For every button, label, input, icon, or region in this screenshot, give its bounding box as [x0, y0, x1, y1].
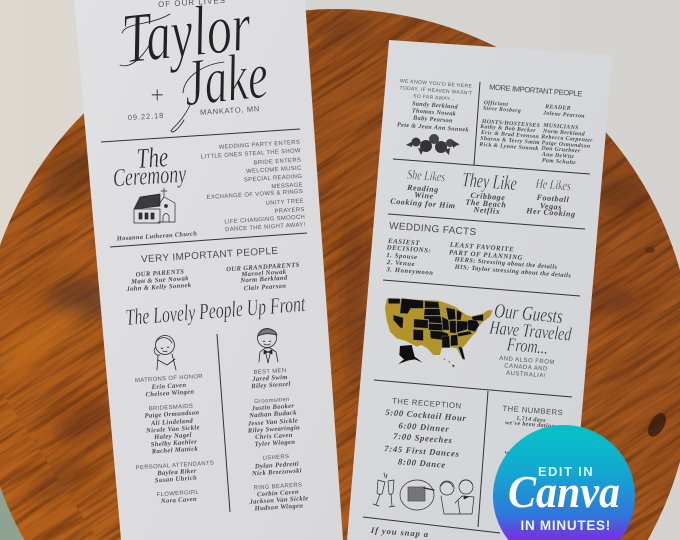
text block: right attendants: Chris Caven	[255, 432, 293, 441]
greenery corner	[0, 487, 24, 540]
text block: they like: They Like	[461, 167, 518, 195]
map: hawaii	[443, 358, 455, 367]
icon: dancing couple	[440, 480, 474, 514]
text block: in memoriam: TODAY, IF HEAVEN WASN'T	[399, 85, 473, 97]
text block: she likes: Cooking for Him	[390, 197, 456, 210]
text block: in memoriam: Thomas Nowak	[412, 107, 457, 118]
badge text: in minutes: IN MINUTES!	[520, 518, 612, 533]
text block: in memoriam: Pete & Jean Ann Sonnek	[397, 121, 470, 134]
text block: the numbers: 1,714 days	[516, 416, 546, 424]
text block: ceremony order: LITTLE ONES STEAL THE SHOW	[201, 148, 301, 160]
text block: right attendants: Tyler Wingen	[254, 439, 296, 448]
heading: very important people: VERY IMPORTANT PEOPLE	[141, 246, 279, 265]
text block: right attendants: Justin Booker	[250, 403, 295, 412]
text block: parents: John & Kelly Sonnek	[125, 282, 192, 293]
text block: reader: READER	[544, 104, 571, 112]
text block: officiant: Steve Rosberg	[483, 106, 521, 114]
heading: more important people: MORE IMPORTANT PEOPLE	[489, 82, 583, 99]
text block: reception schedule	[384, 407, 467, 470]
text block: right attendants: Jesse Van Sickle	[247, 417, 298, 428]
text block: least favorite: PART OF PLANNING	[449, 249, 523, 262]
text block: grandparents	[226, 262, 300, 292]
text block: right attendants: USHERS	[263, 454, 289, 462]
icon: dinner plate	[400, 480, 434, 510]
text block: they like	[461, 167, 518, 216]
text block: parents: OUR PARENTS	[136, 268, 184, 279]
text block: she likes: Wine	[414, 190, 434, 201]
text block: hosts: Rick & Lynne Sonnek	[478, 142, 539, 152]
text block: canada and australia: AUSTRALIA!	[506, 371, 546, 379]
text block: ceremony order: SPECIAL READING	[244, 174, 302, 184]
text block: musicians: Pam Schultz	[542, 158, 577, 166]
text block: canada and australia	[499, 356, 555, 379]
text block: easiest decisions: 1. Spouse	[386, 252, 418, 261]
text block: left attendants	[135, 374, 214, 505]
text block: hosts: Eric & Brad Evenson	[480, 130, 539, 140]
badge logo: canva: Canva	[508, 466, 620, 517]
text block: he likes: He Likes	[534, 175, 572, 194]
text block: right attendants: Nathan Budack	[248, 409, 297, 420]
map: gold states	[385, 298, 493, 360]
text block: right attendants: RING BEARERS	[254, 482, 302, 492]
text block: ceremony order: PRAYERS	[274, 207, 305, 215]
text block: reception schedule: 8:00 Dance	[398, 456, 446, 470]
icon: bride	[154, 336, 176, 370]
text block: least favorite: HERS: Stressing about the details	[453, 256, 558, 271]
text block: right attendants: Riley Swearingin	[247, 424, 300, 435]
text block: hosts	[478, 119, 540, 152]
text block: ceremony order: EXCHANGE OF VOWS & RINGS	[206, 189, 303, 201]
title: couple names: +	[149, 83, 165, 109]
text block: canada and australia: AND ALSO FROM	[499, 356, 555, 366]
text block: least favorite	[449, 242, 572, 279]
chart: us map of guest origins	[385, 298, 493, 367]
text block: the numbers: we've been	[505, 450, 536, 458]
text block: left attendants: Nicole Van Sickle	[145, 424, 200, 435]
text block: hosts: HOSTS/HOSTESSES	[481, 119, 540, 129]
text block: right attendants: Nick Brzezowski	[251, 467, 302, 478]
heading: the ceremony: The	[136, 142, 169, 175]
text block: grandparents: Clair Pearson	[244, 283, 286, 292]
text block: in memoriam: SO FAR AWAY...	[413, 93, 455, 103]
heading: the numbers: THE NUMBERS	[502, 404, 564, 417]
text block: easiest decisions: 2. Venue	[386, 259, 415, 268]
text block: he likes: Football	[535, 193, 570, 204]
text block: ceremony order: WELCOME MUSIC	[246, 166, 302, 175]
text block: he likes: Her Cooking	[525, 206, 576, 219]
map: alaska	[398, 345, 423, 364]
badge text: edit in: EDIT IN	[538, 464, 594, 479]
title: couple names: Jake	[180, 39, 271, 120]
text block: easiest decisions: DECISIONS:	[385, 244, 432, 255]
text block: right attendants: BEST MEN	[253, 368, 287, 376]
text block: left attendants: Baylea Riker	[156, 468, 197, 477]
text block: right attendants: Corbin Caven	[257, 489, 299, 498]
text block: hosts: Kathy & Bob Becker	[479, 124, 536, 134]
text block: easiest decisions	[385, 238, 434, 277]
panel: right program card	[347, 40, 612, 540]
text block: right attendants: Riley Stenzel	[250, 381, 291, 390]
text block: officiant: Officiant	[483, 100, 509, 108]
text block: reader	[542, 104, 585, 120]
text block: left attendants: Shelby Kaehler	[151, 439, 197, 448]
text block: reader: Jolene Pearson	[542, 110, 585, 120]
text block: reception schedule: 7:45 First Dances	[384, 443, 460, 459]
text block: ceremony order: MESSAGE	[271, 182, 303, 190]
text block: right attendants: Dylan Pedretti	[254, 461, 299, 470]
text block: left attendants: Haley Nagel	[153, 432, 192, 441]
text block: right attendants: Jackson Van Sickle	[248, 495, 309, 506]
text block: left attendants: Ali Lindeland	[150, 418, 194, 427]
text block: left attendants: MATRONS OF HONOR	[135, 374, 203, 384]
text block: canada and australia: CANADA AND	[504, 363, 548, 373]
text block: parents: Matt & Sue Nowak	[130, 275, 189, 286]
text block: left attendants: FLOWERGIRL	[157, 490, 200, 498]
text block: grandparents: Marnel Nowak	[240, 269, 287, 278]
text block: right attendants: Groomsmen	[254, 397, 290, 405]
panel: left program card	[74, 0, 343, 540]
icon: champagne flutes	[373, 473, 395, 507]
text block: right attendants: Jared Swim	[251, 374, 288, 383]
text block: musicians: Ann DeWitz	[541, 152, 575, 160]
text block: in memoriam: WE KNOW YOU'D BE HERE	[400, 78, 473, 90]
text block: right attendants	[247, 368, 309, 513]
title: couple names	[118, 0, 271, 132]
text block: ceremony order: DANCE THE NIGHT AWAY!	[225, 222, 306, 233]
heading: the ceremony	[112, 142, 187, 192]
icon: groom	[258, 328, 278, 363]
heading: the lovely people up front: The Lovely People Up Front	[125, 291, 307, 331]
text block: parents	[125, 268, 192, 293]
text block: easiest decisions: 3. Honeymoon	[385, 266, 434, 277]
text block: they like: Cribbage	[470, 191, 506, 202]
text block: he likes	[525, 175, 576, 219]
text block: the numbers	[505, 416, 555, 458]
text block: left attendants: Susan Uhrich	[155, 475, 197, 484]
text block: musicians	[540, 123, 593, 166]
text block: ceremony order: UNITY TREE	[266, 199, 304, 207]
text block: grandparents: Norm Berkland	[239, 274, 288, 285]
text block: left attendants: Chelsea Wingen	[145, 388, 195, 399]
text block: they like: The Beach	[465, 197, 507, 210]
heading: wedding facts: WEDDING FACTS	[389, 221, 477, 238]
text block: musicians: Rebecca Carpenter	[540, 134, 593, 144]
text block: the numbers: we've been dating	[505, 420, 555, 430]
text block: musicians: MUSICIANS	[542, 123, 579, 131]
text block: she likes: Reading	[406, 183, 439, 194]
text block: ceremony order: WEDDING PARTY ENTERS	[219, 140, 300, 151]
text block: musicians: Dan Gruebner	[540, 145, 581, 155]
text block: she likes	[390, 166, 456, 210]
heading: the reception: THE RECEPTION	[392, 396, 462, 411]
date: 09.22.18	[128, 111, 164, 122]
map: black states	[388, 298, 483, 359]
text block: in memoriam	[397, 78, 473, 134]
heading: the ceremony: Ceremony	[112, 159, 187, 192]
text block: reception schedule: 5:00 Cocktail Hour	[385, 407, 467, 423]
heading: our guests have traveled from: From...	[505, 333, 549, 358]
text block: left attendants: Rachel Mattick	[151, 446, 199, 455]
text block: she likes: She Likes	[407, 166, 446, 185]
text block: least favorite: HIS: Taylor stressing about the details	[454, 264, 572, 279]
text block: left attendants: Paige Ormundson	[144, 409, 200, 420]
text block: ceremony order	[201, 140, 306, 233]
text block: left attendants: Erin Caven	[150, 382, 187, 391]
text block: if you snap: If you snap a	[370, 525, 429, 539]
text block: reception schedule: 6:00 Dinner	[398, 420, 450, 434]
text block: ceremony order: LIFE CHANGING SMOOCH	[224, 214, 305, 226]
text block: reception schedule: 7:00 Speeches	[393, 431, 453, 445]
location: MANKATO, MN	[200, 104, 260, 117]
text block: left attendants: PERSONAL ATTENDANTS	[136, 461, 214, 471]
text block: left attendants: BRIDESMAIDS	[149, 404, 193, 412]
text block: left attendants: Nora Caven	[160, 496, 197, 505]
text block: they like: Netflix	[472, 205, 501, 216]
badge: edit in canva	[493, 425, 635, 540]
text block: musicians: Paige Osmundson	[541, 140, 591, 150]
text block: he likes: Vegas	[540, 201, 562, 212]
text block: musicians: Norm Berkland	[542, 128, 585, 138]
text block: easiest decisions: EASIEST	[387, 238, 421, 247]
text block: ceremony order: BRIDE ENTERS	[253, 158, 301, 166]
icon: floral sprig	[406, 134, 459, 155]
heading: our guests have traveled from: Have Traveled	[488, 316, 573, 345]
text block: hosts: Sharon & Terry Smim	[480, 136, 540, 146]
heading: our guests have traveled from	[488, 299, 573, 358]
text block: least favorite: LEAST FAVORITE	[449, 242, 514, 253]
text block: in memoriam: Baby Pearson	[412, 114, 453, 125]
icon: church	[134, 188, 175, 223]
heading: our guests have traveled from: Our Guests	[493, 299, 564, 328]
text block: in memoriam: Sandy Berkland	[412, 100, 459, 111]
text block: officiant	[483, 100, 521, 114]
caption: church name: Hosanna Lutheran Church	[116, 230, 197, 243]
text block: right attendants: Hudson Wingen	[253, 502, 304, 513]
text block: grandparents: OUR GRANDPARENTS	[226, 262, 300, 273]
